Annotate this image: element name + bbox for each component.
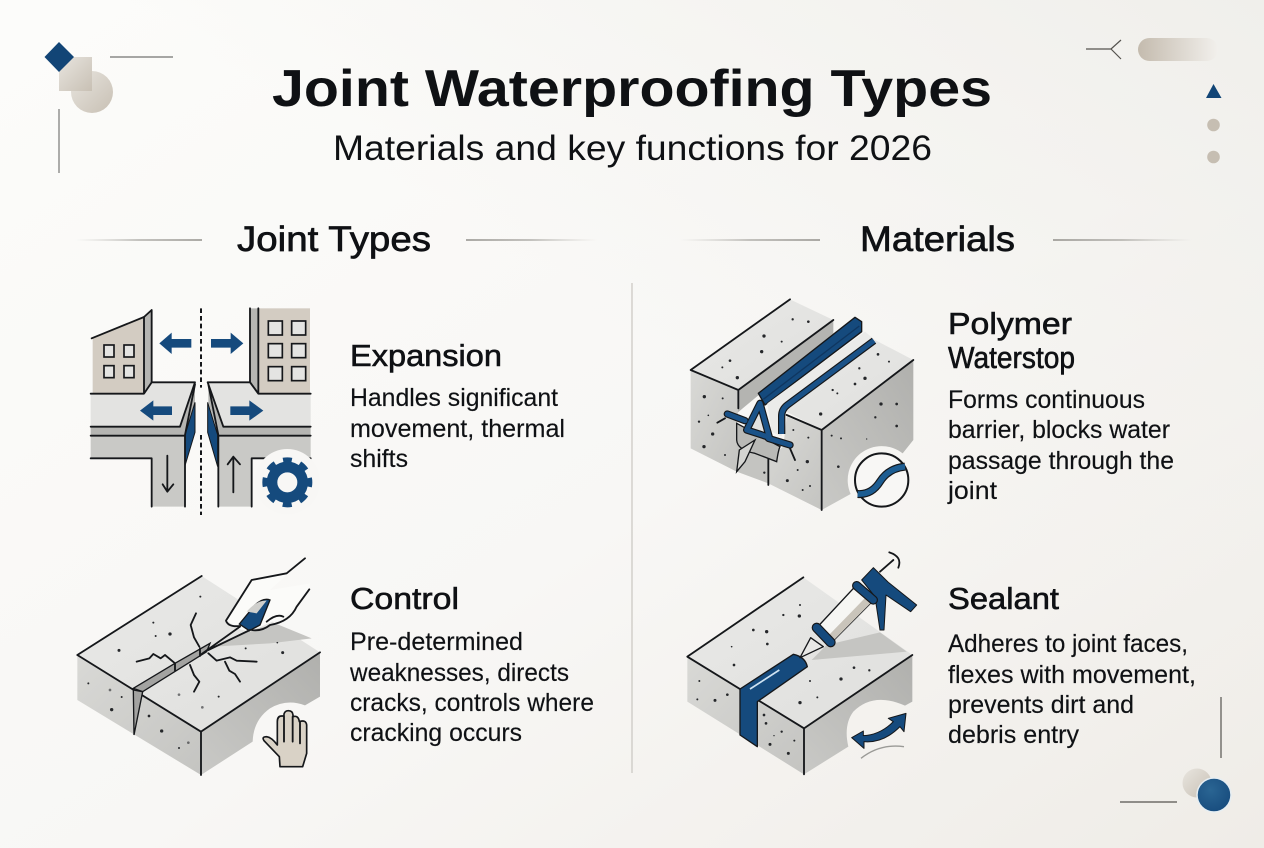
label: Expansion: Expansion [350, 338, 502, 373]
description: Expansion [350, 384, 565, 473]
label: Control: Control [350, 581, 459, 616]
waterstop bulb [727, 403, 790, 445]
description: Control: weaknesses, directs [349, 659, 569, 687]
icon: concrete slab with control joint [77, 558, 320, 775]
icon: flex arrow [852, 713, 906, 758]
description: Sealant: debris entry [948, 721, 1079, 749]
description: Control [349, 628, 594, 747]
label: Sealant: Sealant [948, 581, 1059, 616]
panel: Expansion [91, 308, 565, 515]
icon: concrete slab with caulking gun [687, 552, 917, 774]
decoration: bottom right shapes [1120, 697, 1231, 812]
decoration: top left shapes [44, 42, 173, 173]
description: Polymer Waterstop: passage through the [948, 447, 1174, 475]
description: Control: cracks, controls where [350, 689, 594, 717]
description: Polymer Waterstop [947, 386, 1174, 505]
icon: hand with tool [202, 558, 310, 654]
description: Polymer Waterstop: barrier, blocks water [948, 416, 1170, 444]
description: Polymer Waterstop: Forms continuous [948, 386, 1145, 414]
icon: caulking gun [800, 552, 917, 658]
panel: Sealant [687, 552, 1196, 774]
description: Sealant: Adheres to joint faces, [948, 630, 1188, 658]
description: Polymer Waterstop: joint [947, 477, 997, 505]
label: Polymer Waterstop: Waterstop [948, 340, 1075, 375]
icon: gear [266, 461, 309, 504]
title: Joint Waterproofing Types [272, 60, 992, 118]
icon: expansion joint between buildings [91, 308, 320, 515]
panel: Polymer Waterstop [691, 299, 1174, 510]
heading: Materials: Materials [860, 220, 1015, 259]
subtitle: Materials and key functions for 2026 [333, 129, 932, 168]
description: Expansion: movement, thermal [350, 415, 565, 443]
decoration: top right shapes [1086, 38, 1222, 163]
description: Sealant [948, 630, 1196, 749]
description: Control: cracking occurs [350, 719, 522, 747]
label: Polymer Waterstop: Polymer [948, 306, 1072, 341]
icon: concrete blocks with polymer waterstop [691, 299, 913, 510]
panel: Control [77, 558, 594, 775]
label: Polymer Waterstop [948, 306, 1075, 375]
description: Expansion: Handles significant [350, 384, 558, 412]
description: Sealant: prevents dirt and [948, 691, 1134, 719]
icon: open hand [263, 711, 307, 767]
description: Control: Pre-determined [350, 628, 523, 656]
heading: Joint Types: Joint Types [237, 220, 431, 259]
description: Sealant: flexes with movement, [948, 661, 1196, 689]
description: Expansion: shifts [350, 445, 408, 473]
